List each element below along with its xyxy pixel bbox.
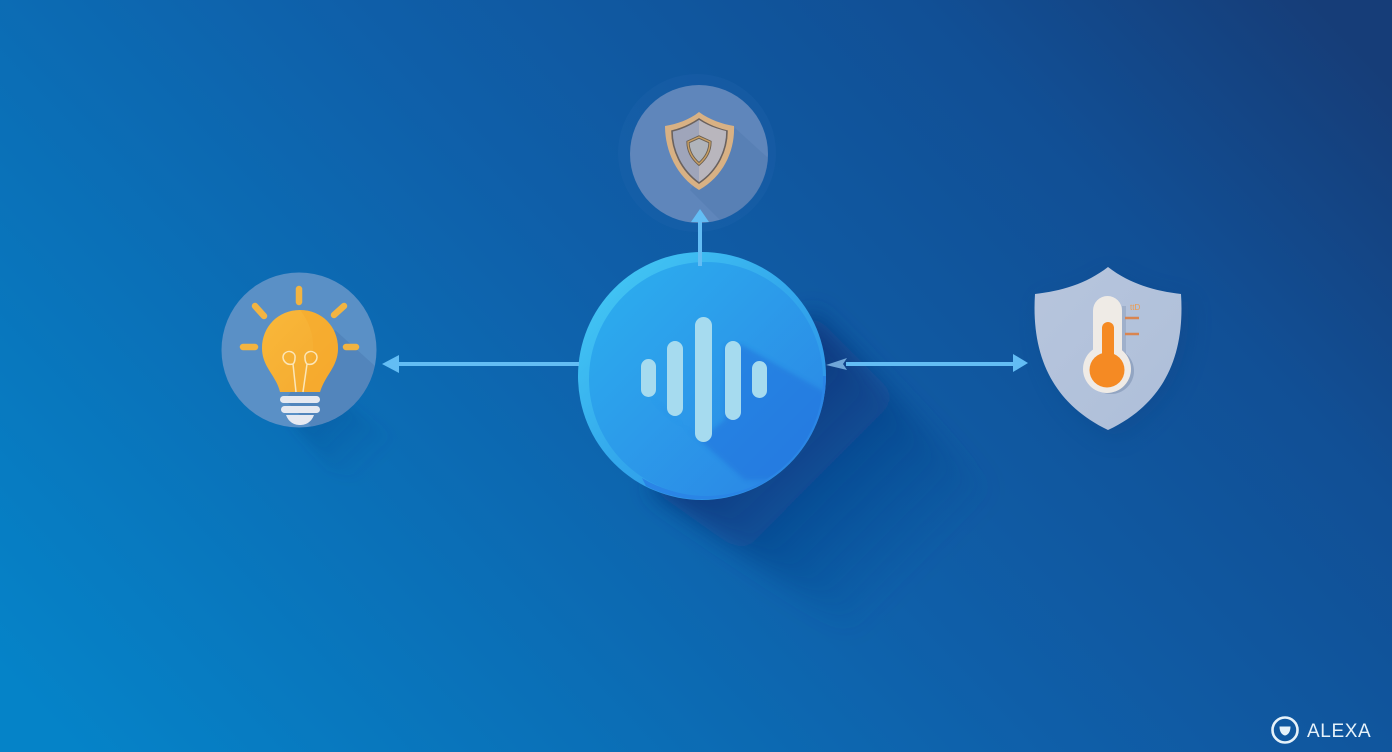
node disc (222, 272, 376, 428)
node halo (618, 74, 776, 232)
icon: inner crest (688, 137, 710, 164)
icon: shield (665, 112, 734, 190)
waveform shadow (702, 344, 822, 480)
icon: bulb (262, 310, 338, 425)
icon: thermometer (1083, 296, 1140, 394)
hub disc (578, 252, 826, 500)
brand name: ALEXA (1307, 721, 1371, 742)
arrow: hub to thermometer (826, 354, 1028, 372)
shield body (1035, 267, 1181, 430)
shield shadow (1042, 275, 1188, 438)
icon: sound waveform (641, 317, 767, 442)
bulb node shadow (290, 400, 400, 490)
thermometer label: ttD (1130, 303, 1140, 312)
panel: central voice hub (578, 252, 928, 588)
panel: light bulb node (222, 272, 579, 446)
icon: alexa ring (1272, 718, 1298, 742)
node disc (630, 85, 768, 223)
logo: ALEXA (1272, 718, 1371, 742)
arrow: hub to bulb (382, 355, 579, 373)
arrow: hub to shield (691, 209, 709, 266)
panel: security shield node (618, 74, 776, 266)
hub long shadow (650, 312, 990, 630)
thermometer ticks (1125, 318, 1139, 334)
panel: temperature shield node (826, 267, 1188, 438)
icon: bulb rays (243, 289, 356, 347)
